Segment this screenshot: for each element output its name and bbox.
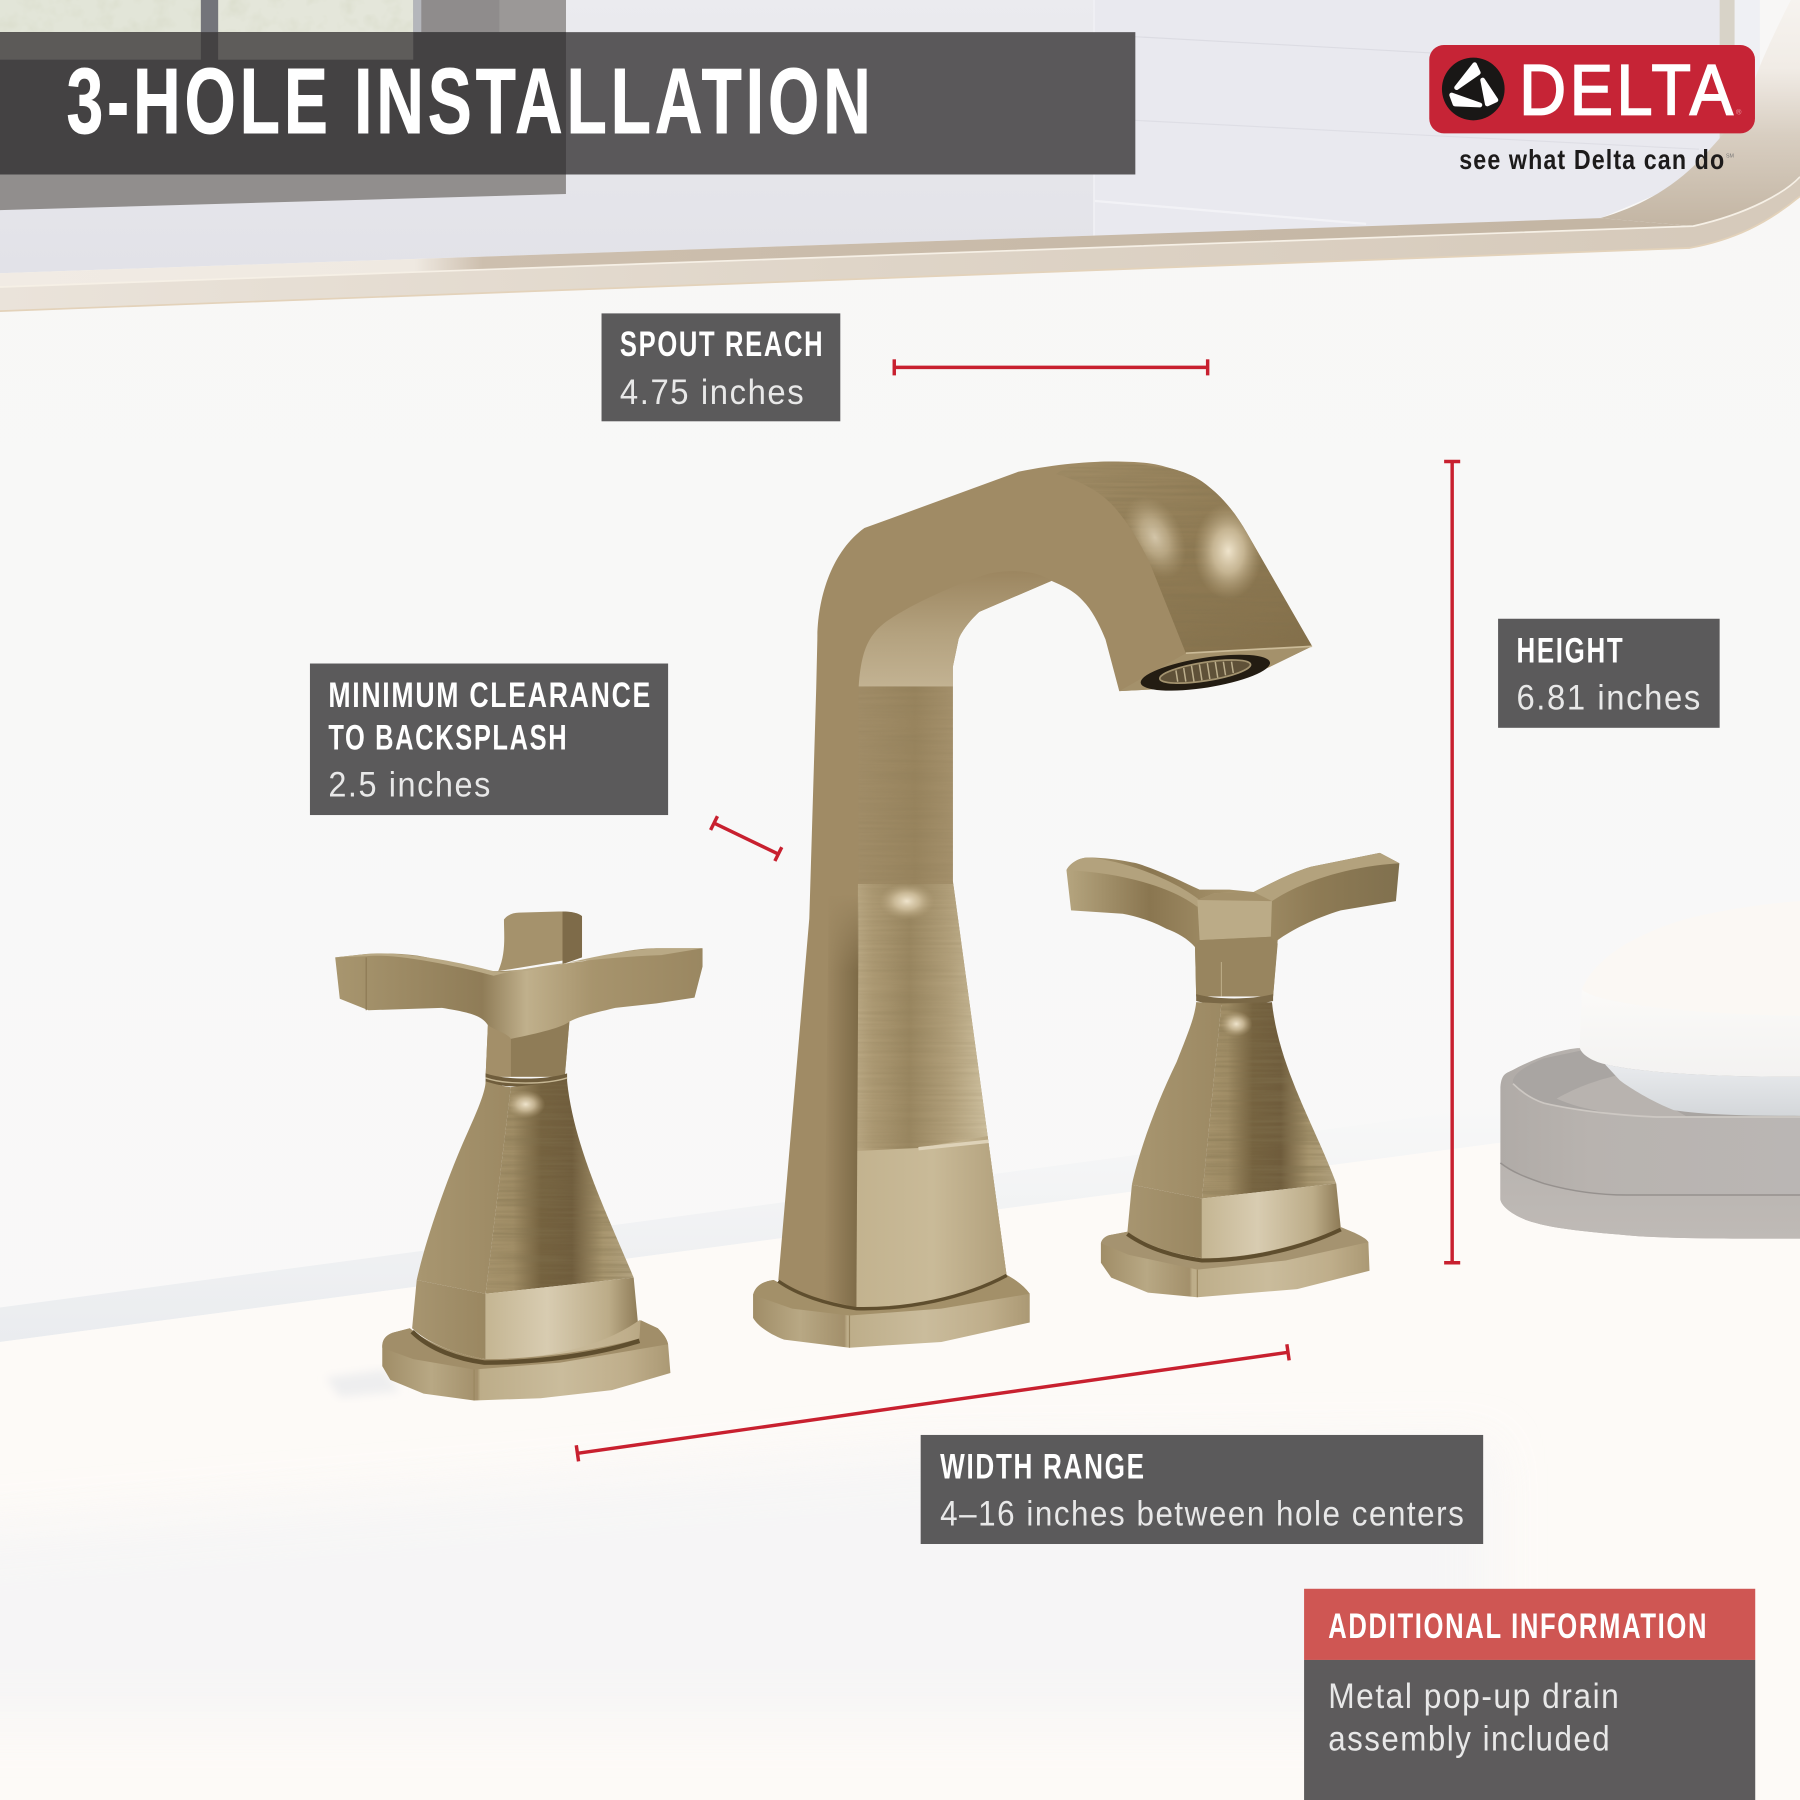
dimension line: spout reach (894, 359, 1208, 375)
cone band (412, 1280, 486, 1359)
plate shadow (326, 1370, 399, 1397)
nozzle face (1119, 646, 1312, 691)
dish interior (1513, 1050, 1800, 1117)
dish foot (1500, 1163, 1800, 1239)
soap bowl (1605, 1064, 1800, 1116)
column left face shading (832, 906, 858, 1307)
callout: spout reach: 4.75 inches (620, 372, 805, 412)
panel body: Metal pop-up drain (1328, 1676, 1620, 1716)
neck (1195, 937, 1278, 996)
base plate (382, 1320, 670, 1401)
aerator (1138, 648, 1272, 698)
cone band (1127, 1185, 1202, 1258)
right handle (1066, 853, 1399, 1297)
spout head side (1056, 461, 1312, 653)
callout: minimum clearance: TO BACKSPLASH (328, 718, 568, 758)
dimension line: width range (576, 1344, 1289, 1461)
neck (486, 1025, 511, 1077)
panel: additional information (1304, 1589, 1755, 1800)
dimension line: height (1444, 461, 1460, 1263)
base plate (1101, 1227, 1370, 1297)
callout: spout reach: SPOUT REACH (620, 324, 824, 364)
logo mark (1442, 58, 1505, 120)
logo: Delta (1429, 45, 1755, 175)
spout (778, 459, 1314, 1314)
logo wordmark: DELTA (1519, 50, 1737, 130)
logo: Delta: SM (1726, 153, 1734, 159)
callout: width range: 4–16 inches between hole centers (940, 1494, 1465, 1534)
title: 3-HOLE INSTALLATION (67, 49, 875, 153)
dish body (1500, 1048, 1800, 1239)
rear cross arm (498, 911, 582, 971)
spout underside (859, 571, 1052, 686)
faucet (326, 459, 1399, 1401)
cone left face (417, 1081, 511, 1294)
soap dish (1500, 901, 1800, 1239)
cross arms (1066, 853, 1399, 996)
cone right face (482, 1079, 637, 1297)
logo badge (1429, 45, 1755, 133)
callout: height (1498, 619, 1720, 728)
panel body: assembly included (1328, 1719, 1611, 1759)
center hex (1197, 892, 1272, 940)
callout: width range: WIDTH RANGE (940, 1447, 1146, 1487)
soap body (1580, 990, 1800, 1077)
logo: Delta: ® (1736, 107, 1742, 116)
callout: minimum clearance (310, 664, 668, 815)
dimension line: clearance (711, 816, 782, 861)
title banner (0, 32, 1135, 174)
soap top (1582, 901, 1800, 1016)
column upper face (859, 686, 953, 884)
ring (1196, 994, 1273, 1005)
column lower face (856, 884, 1006, 1307)
mirror frame (0, 0, 1800, 311)
panel body (1304, 1660, 1755, 1800)
left handle (335, 911, 703, 1401)
callout: spout reach (602, 313, 840, 421)
countertop (0, 1105, 1800, 1800)
callout: minimum clearance: MINIMUM CLEARANCE (328, 675, 652, 715)
mirror reflection (0, 0, 1760, 273)
spout base plate (753, 1274, 1030, 1348)
reflected window (0, 0, 566, 210)
ring (486, 1073, 567, 1087)
cross arms (335, 948, 703, 1077)
callout: height: HEIGHT (1516, 630, 1624, 670)
cone left face (1132, 1002, 1221, 1198)
cone right face (1200, 999, 1340, 1201)
spout silhouette (778, 461, 1312, 1308)
callout: width range (921, 1435, 1483, 1544)
panel header (1304, 1589, 1755, 1660)
tagline: see what Delta can do (1459, 144, 1725, 175)
callout: minimum clearance: 2.5 inches (328, 765, 492, 805)
callout: height: 6.81 inches (1516, 677, 1702, 717)
